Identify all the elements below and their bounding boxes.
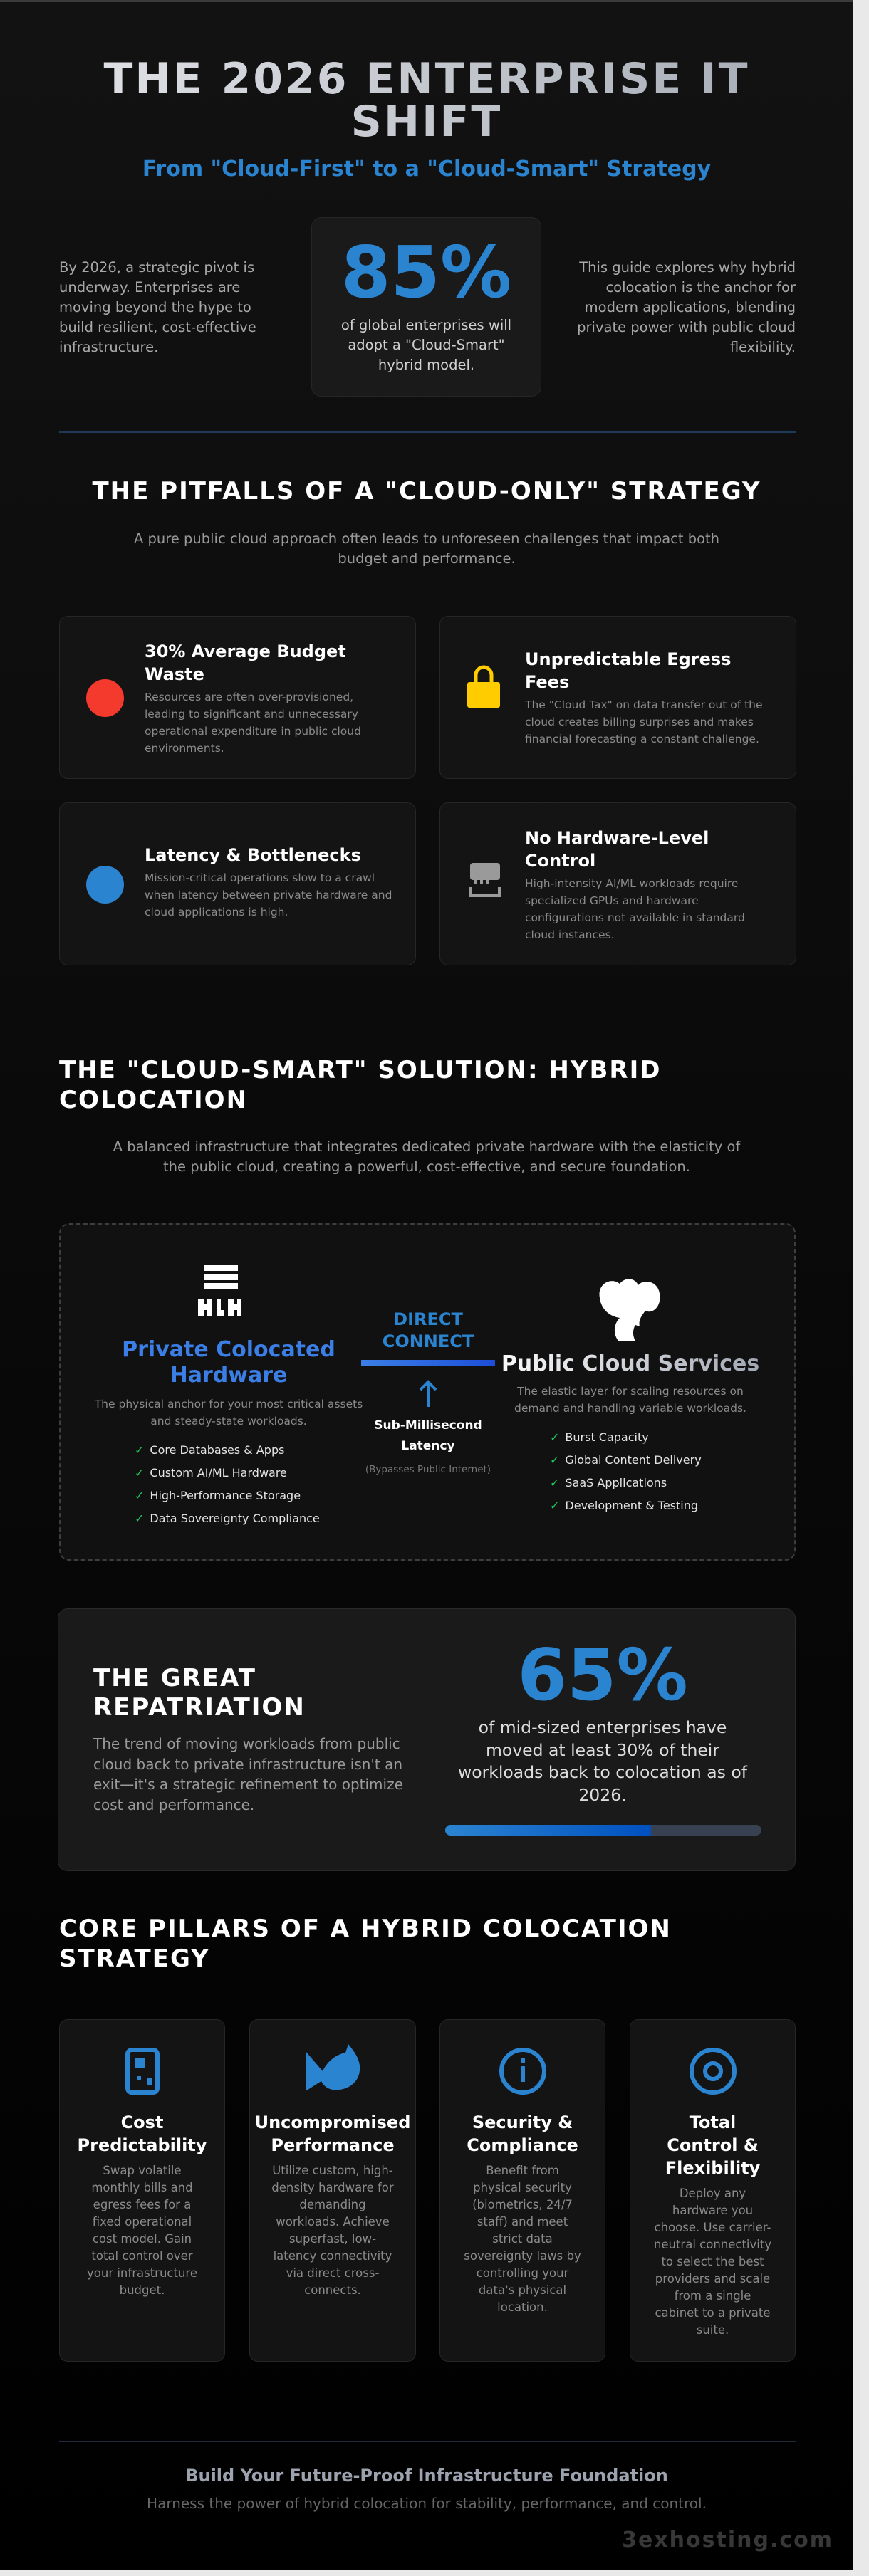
stat caption: of mid-sized enterprises have moved at least 30% of their workloads back to colocation as of 2026.	[458, 1717, 747, 1804]
text: latency: Mission-critical operations slow to a crawl when latency between private hardware and cloud applications is high.	[145, 871, 392, 918]
panel: hardware control	[439, 802, 796, 965]
checklist: public: ✓ Global Content Delivery	[550, 1453, 702, 1467]
bypass note: (Bypasses Public Internet)	[365, 1464, 491, 1475]
pillar: performance	[249, 2019, 416, 2362]
subtitle: From "Cloud-First" to a "Cloud-Smart" Strategy	[142, 157, 711, 182]
text: budget waste	[145, 642, 361, 755]
checklist: private	[135, 1443, 320, 1525]
heading: solution	[59, 1056, 661, 1114]
panel: great repatriation	[58, 1608, 796, 1871]
panel: latency	[59, 802, 416, 965]
icon: red circle	[86, 679, 124, 717]
text: budget waste: 30% Average Budget Waste	[145, 642, 346, 684]
checklist: public	[550, 1430, 702, 1512]
checklist: private: ✓ Data Sovereignty Compliance	[135, 1512, 320, 1525]
text: performance: Utilize custom, high-density hardware for demanding workloads. Achieve superfast, low-latency connectivity via direct cross-connects.	[271, 2164, 394, 2297]
stat caption: of global enterprises will adopt a "Cloud-Smart" hybrid model.	[341, 317, 511, 373]
title: private hardware: Private Colocated	[122, 1337, 335, 1362]
icon: lock	[467, 665, 500, 708]
text: security: Security & Compliance	[467, 2112, 578, 2155]
label: direct connect: CONNECT	[383, 1331, 474, 1351]
checklist: private: ✓ High-Performance Storage	[135, 1489, 301, 1502]
checklist: public: ✓ Burst Capacity	[550, 1430, 649, 1444]
desc: public: The elastic layer for scaling resources on demand and handling variable workloads.	[514, 1385, 746, 1415]
text: cost	[77, 2112, 207, 2297]
connector bar	[361, 1360, 495, 1366]
checklist: public: ✓ Development & Testing	[550, 1499, 698, 1512]
heading: repatriation: THE GREAT	[93, 1664, 256, 1692]
icon: info ring	[499, 2048, 546, 2095]
title	[0, 58, 853, 143]
text: cost: Swap volatile monthly bills and egress fees for a fixed operational cost model. Gain total control over your infrastructure budget.	[87, 2164, 197, 2297]
solution intro: A balanced infrastructure that integrates dedicated private hardware with the elasticity of the public cloud, creating a powerful, cost-effective, and secure foundation.	[113, 1138, 740, 1175]
stat box: 85%	[311, 217, 541, 397]
pillar: security	[439, 2019, 605, 2362]
text: security: Benefit from physical security (biometrics, 24/7 staff) and meet strict data sovereignty laws by controlling your data's physical location.	[464, 2164, 581, 2314]
heading: core pillars: STRATEGY	[59, 1944, 210, 1973]
desc: repatriation: The trend of moving workloads from public cloud back to private infrastructure isn't an exit—it's a strategic refinement to optimize cost and performance.	[93, 1735, 403, 1813]
watermark: 3exhosting.com	[622, 2528, 833, 2553]
text: control: Total Control & Flexibility	[665, 2112, 760, 2178]
panel: hybrid diagram	[59, 1223, 796, 1561]
arrow: up	[419, 1380, 437, 1407]
icon: chip	[469, 863, 501, 897]
title: public cloud: Public Cloud Services	[501, 1351, 759, 1376]
heading: core pillars: CORE PILLARS OF A HYBRID COLOCATION	[59, 1915, 672, 1943]
text: budget waste: Resources are often over-provisioned, leading to significant and unnecessary operational expenditure in public cloud environments.	[145, 691, 361, 755]
text: egress: The "Cloud Tax" on data transfer out of the cloud creates billing surprises and makes financial forecasting a constant challenge.	[525, 698, 763, 745]
label: direct connect: DIRECT	[393, 1309, 463, 1329]
icon: calculator	[125, 2048, 160, 2095]
footer heading: Build Your Future-Proof Infrastructure Foundation	[185, 2466, 668, 2486]
panel: budget waste	[59, 616, 416, 779]
icon: blue circle	[86, 866, 124, 904]
heading: core pillars	[59, 1915, 672, 1973]
title: private hardware: Hardware	[170, 1363, 287, 1388]
checklist: public: ✓ SaaS Applications	[550, 1476, 667, 1489]
latency label	[374, 1418, 482, 1453]
stat: 65%: 65%	[517, 1633, 688, 1717]
pillar: cost	[59, 2019, 225, 2362]
label: direct connect	[383, 1309, 474, 1351]
checklist: private: ✓ Custom AI/ML Hardware	[135, 1466, 287, 1480]
footer text: Harness the power of hybrid colocation for stability, performance, and control.	[147, 2495, 707, 2512]
text: control: Deploy any hardware you choose. Use carrier-neutral connectivity to select the best providers and scale from a single cabinet to a private suite.	[654, 2187, 771, 2337]
progress bar	[445, 1825, 761, 1836]
intro right text: This guide explores why hybrid colocation is the anchor for modern applications, blending private power with public cloud flexibility.	[577, 259, 796, 355]
heading: solution: COLOCATION	[59, 1086, 248, 1114]
icon: bolt blob	[306, 2044, 360, 2091]
text: performance: Uncompromised Performance	[255, 2112, 410, 2155]
heading: repatriation	[93, 1664, 306, 1722]
text: control	[654, 2112, 771, 2337]
desc: private: The physical anchor for your most critical assets and steady-state workloads.	[95, 1398, 363, 1428]
intro left text: By 2026, a strategic pivot is underway. Enterprises are moving beyond the hype to build resilient, cost-effective infrastructure.	[59, 259, 256, 355]
title: private hardware	[122, 1337, 335, 1388]
pitfalls intro: A pure public cloud approach often leads to unforeseen challenges that impact both budget and performance.	[134, 530, 719, 567]
text: performance	[255, 2112, 410, 2297]
checklist: private: ✓ Core Databases & Apps	[135, 1443, 284, 1457]
text: latency	[145, 845, 392, 918]
icon: target ring	[690, 2048, 737, 2095]
latency label: Latency	[401, 1439, 455, 1453]
text: cost: Cost Predictability	[77, 2112, 207, 2155]
text: latency: Latency & Bottlenecks	[145, 845, 361, 865]
heading: solution: THE "CLOUD-SMART" SOLUTION: HYBRID	[59, 1056, 661, 1084]
heading: repatriation: REPATRIATION	[93, 1693, 306, 1722]
latency label: Sub-Millisecond	[374, 1418, 482, 1433]
text: egress	[524, 649, 763, 745]
panel: egress fees	[439, 616, 796, 779]
text: hardware: No Hardware-Level Control	[525, 828, 709, 871]
text: hardware	[525, 828, 745, 941]
pillar: control	[630, 2019, 796, 2362]
stat number: 85%	[341, 231, 511, 314]
title: SHIFT	[351, 97, 502, 147]
icon: server	[198, 1265, 241, 1316]
title: THE 2026 ENTERPRISE IT	[103, 54, 750, 104]
text: egress: Unpredictable Egress Fees	[525, 649, 731, 692]
heading: pitfalls: THE PITFALLS OF A "CLOUD-ONLY" STRATEGY	[92, 477, 761, 506]
icon: cloud	[599, 1279, 660, 1341]
text: hardware: High-intensity AI/ML workloads require specialized GPUs and hardware configurations not available in standard cloud instances.	[525, 877, 745, 941]
